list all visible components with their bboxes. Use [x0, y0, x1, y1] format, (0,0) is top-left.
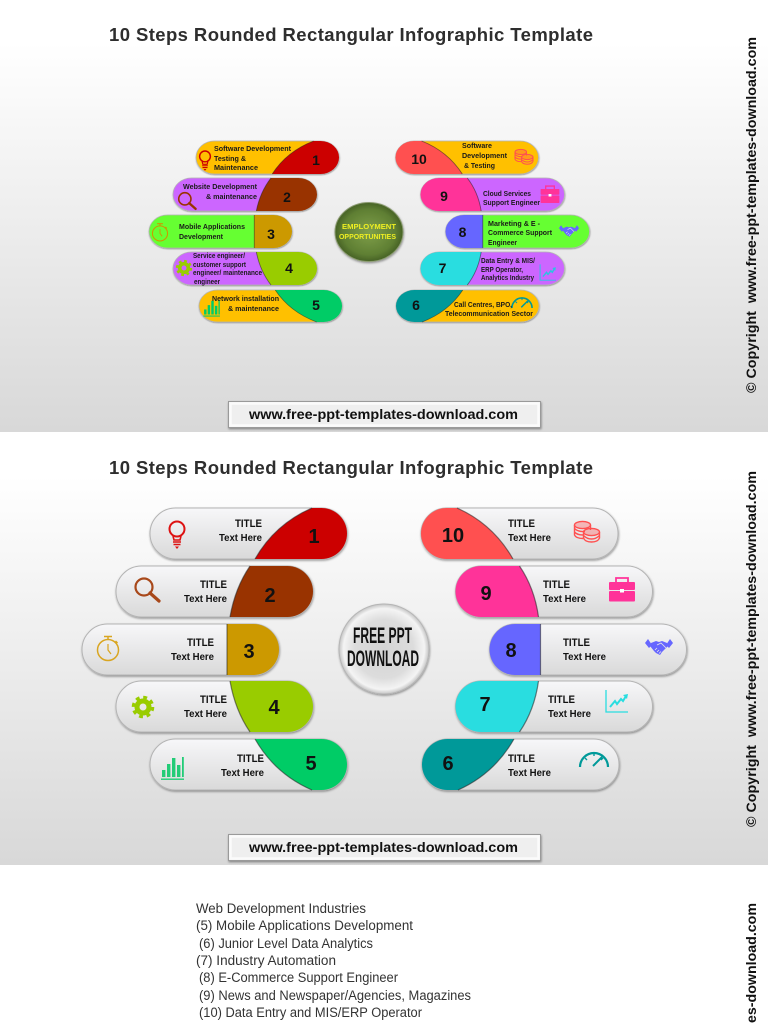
text block: industries list: Web Development Industries — [196, 901, 366, 916]
small pill 8 — [446, 215, 590, 248]
large pill 1: 1 — [308, 526, 320, 548]
small pill 7: Data Entry & MIS/ — [481, 258, 535, 265]
large pill 8: TITLE — [563, 637, 590, 649]
small pill 4: Service engineer/ — [193, 253, 245, 260]
small pill 2 — [173, 178, 317, 211]
website banner slide 1 — [228, 402, 540, 428]
text block: industries list: (5) Mobile Applications Development — [196, 918, 413, 933]
small pill 4 — [173, 252, 317, 286]
small pill 6: Telecommunication Sector — [445, 311, 533, 318]
large pill 6: TITLE — [508, 753, 535, 765]
small pill 6: 6 — [412, 297, 420, 313]
text block: industries list: (6) Junior Level Data Analytics — [199, 936, 373, 951]
small pill 7 — [420, 252, 565, 285]
small pill 8: 8 — [459, 224, 467, 240]
heading: slide 1 title: 10 Steps Rounded Rectangular Infographic Template — [109, 24, 593, 45]
small pill 5: Network installation — [212, 296, 279, 303]
large pill 3 — [82, 624, 279, 675]
small pill 9 — [420, 178, 565, 211]
center badge: employment opportunities: EMPLOYMENT — [342, 222, 396, 231]
large pill 5: TITLE — [237, 753, 264, 765]
large pill 4: TITLE — [200, 694, 227, 706]
panel: slide 2 background — [0, 433, 768, 865]
text block: industries list: (9) News and Newspaper/Agencies, Magazines — [199, 988, 471, 1003]
small pill 1: 1 — [312, 152, 320, 168]
large pill 9: TITLE — [543, 579, 570, 591]
large pill 5: Text Here — [221, 768, 264, 779]
center badge: free ppt download: DOWNLOAD — [347, 646, 419, 671]
small pill 10: & Testing — [464, 163, 495, 170]
small pill 9: 9 — [440, 188, 448, 204]
small pill 10: Development — [462, 153, 508, 160]
center badge: free ppt download — [339, 604, 429, 694]
small pill 9: Support Engineer — [483, 200, 540, 207]
large pill 6: Text Here — [508, 768, 551, 779]
small pill 1 — [196, 141, 339, 174]
text block: industries list — [196, 901, 471, 1020]
large pill 8 — [490, 624, 686, 675]
vertical copyright slide 2: © Copyright www.free-ppt-templates-download.com — [743, 471, 759, 827]
large pill 10: TITLE — [508, 518, 535, 530]
center badge: free ppt download: FREE PPT — [353, 623, 412, 648]
large pill 4 — [116, 681, 313, 732]
small pill 4: customer support — [193, 262, 247, 269]
large pill 9: Text Here — [543, 594, 586, 605]
small pill 6 — [396, 290, 539, 322]
large pill 2 — [116, 566, 313, 617]
small pill 1: Software Development — [214, 146, 292, 153]
website banner slide 1: www.free-ppt-templates-download.com — [248, 406, 518, 422]
small pill 4: engineer — [194, 279, 220, 286]
large pill 3: TITLE — [187, 637, 214, 649]
large pill 10: 10 — [442, 525, 464, 547]
panel: slide 2 template infographic — [82, 508, 686, 790]
small pill 10: 10 — [411, 151, 427, 167]
small pill 5: 5 — [312, 297, 320, 313]
website banner slide 2: www.free-ppt-templates-download.com — [248, 839, 518, 855]
small pill 10: Software — [462, 143, 492, 150]
panel: slide 1 filled infographic — [149, 141, 590, 322]
small pill 5 — [199, 290, 342, 322]
text block: industries list: (10) Data Entry and MIS/ERP Operator — [199, 1005, 422, 1020]
small pill 6: Call Centres, BPO, — [454, 302, 512, 309]
text block: industries list: (7) Industry Automation — [196, 953, 336, 968]
small pill 4: 4 — [285, 260, 293, 276]
vertical copyright slide 3, cut off by the page edge: es-download.com — [743, 903, 759, 1023]
small pill 2: 2 — [283, 189, 291, 205]
large pill 1: Text Here — [219, 533, 262, 544]
large pill 7: 7 — [479, 694, 491, 716]
small pill 8: Commerce Support — [488, 230, 553, 237]
large pill 7: TITLE — [548, 694, 575, 706]
large pill 2: 2 — [264, 585, 276, 607]
large pill 4: Text Here — [184, 709, 227, 720]
website banner slide 2 — [228, 834, 540, 860]
large pill 8: 8 — [505, 640, 517, 662]
large pill 9: 9 — [480, 583, 492, 605]
large pill 5: 5 — [305, 753, 317, 775]
center badge: employment opportunities — [335, 202, 403, 262]
large pill 8: Text Here — [563, 652, 606, 663]
small pill 3 — [149, 215, 292, 248]
small pill 8: Marketing & E - — [488, 221, 541, 228]
small pill 3: Development — [179, 234, 224, 241]
small pill 5: & maintenance — [228, 306, 279, 313]
small pill 3: Mobile Applications — [179, 224, 245, 231]
large pill 9 — [456, 566, 652, 617]
large pill 1 — [150, 508, 347, 559]
large pill 10: Text Here — [508, 533, 551, 544]
large pill 6 — [422, 739, 619, 790]
small pill 7: 7 — [439, 260, 447, 276]
vertical copyright slide 1: © Copyright www.free-ppt-templates-download.com — [743, 37, 759, 393]
center badge: employment opportunities: OPPORTUNITIES — [339, 232, 396, 241]
small pill 4: engineer/ maintenance — [193, 270, 262, 277]
large pill 2: TITLE — [200, 579, 227, 591]
small pill 1: Maintenance — [214, 165, 258, 172]
small pill 2: Website Development — [183, 184, 258, 191]
large pill 7 — [456, 681, 652, 732]
large pill 10 — [421, 508, 618, 559]
small pill 7: Analytics Industry — [481, 275, 534, 282]
heading: slide 2 title: 10 Steps Rounded Rectangular Infographic Template — [109, 457, 593, 478]
large pill 6: 6 — [442, 753, 454, 775]
small pill 9: Cloud Services — [483, 191, 531, 198]
small pill 8: Engineer — [488, 240, 517, 247]
large pill 1: TITLE — [235, 518, 262, 530]
large pill 7: Text Here — [548, 709, 591, 720]
small pill 7: ERP Operator, — [481, 267, 523, 274]
large pill 4: 4 — [268, 697, 280, 719]
large pill 2: Text Here — [184, 594, 227, 605]
large pill 5 — [150, 739, 347, 790]
panel: slide 1 background — [0, 0, 768, 432]
small pill 1: Testing & — [214, 156, 246, 163]
large pill 3: 3 — [243, 641, 255, 663]
large pill 3: Text Here — [171, 652, 214, 663]
small pill 2: & maintenance — [206, 194, 257, 201]
small pill 3: 3 — [267, 226, 275, 242]
small pill 10 — [396, 141, 539, 174]
text block: industries list: (8) E-Commerce Support Engineer — [199, 970, 398, 985]
